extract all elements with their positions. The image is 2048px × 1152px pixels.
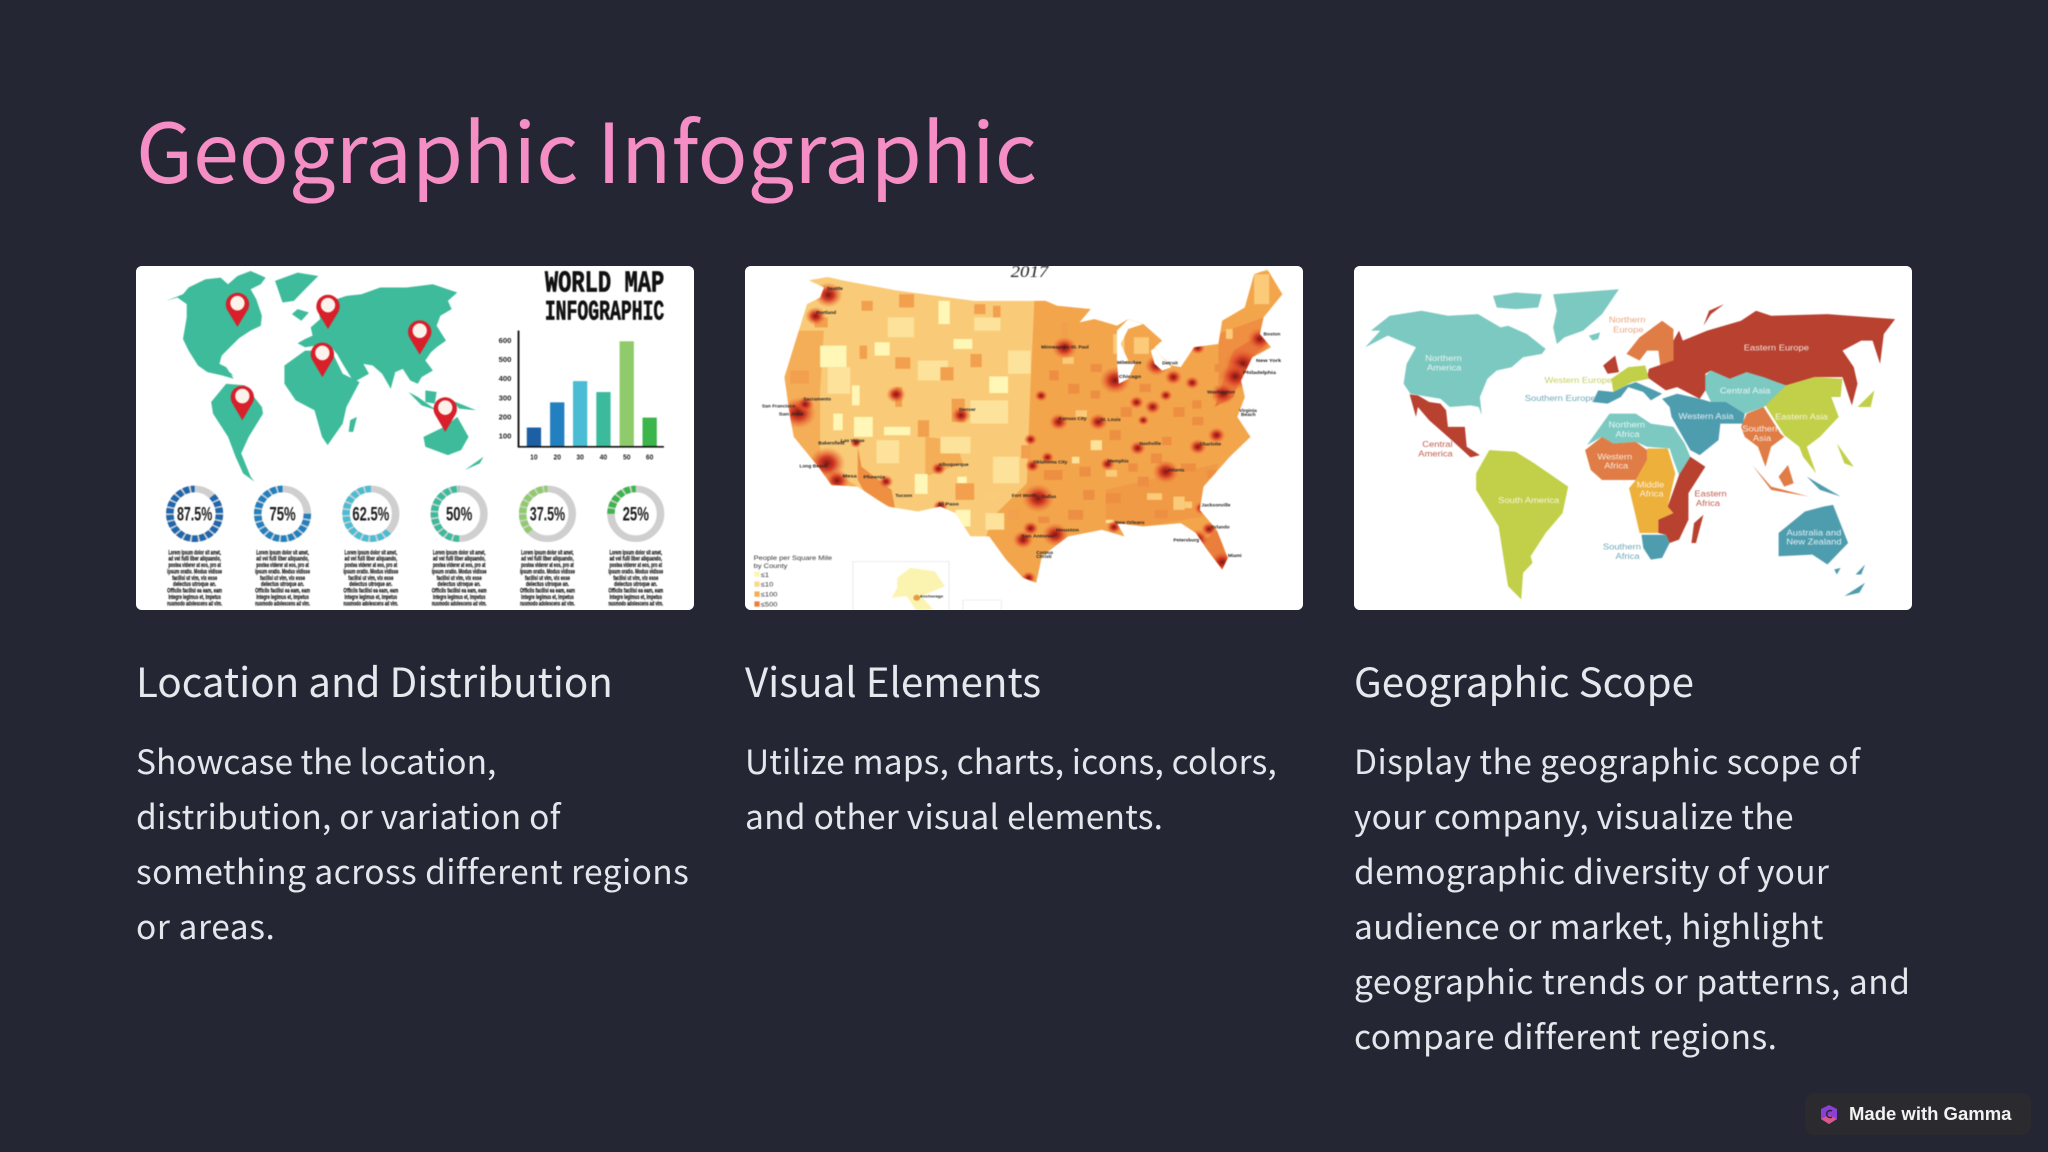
lorem ipsum text columns: integre legimus et, impetus: [433, 594, 486, 601]
text: visual elements: Utilize maps, charts, icons, colors,: [745, 735, 1277, 784]
heading: location and distribution: Location and Distribution: [136, 650, 613, 709]
city labels: Tucson: [895, 493, 912, 498]
lorem ipsum text columns: integre legimus et, impetus: [521, 594, 574, 601]
lorem ipsum text columns: Lorem ipsum dolor sit amet,: [168, 550, 221, 556]
region labels: Eastern: [1694, 489, 1727, 498]
region labels: Africa: [1696, 498, 1720, 508]
title: Geographic Infographic: [136, 87, 1037, 207]
lorem ipsum text columns: [167, 550, 663, 607]
panel: world map infographic image: [136, 266, 694, 610]
donut percentage labels: 50%: [446, 504, 472, 525]
city labels: Memphis: [1108, 459, 1129, 464]
Alaska inset: Anchorage: [920, 594, 944, 599]
region labels: Eastern Asia: [1775, 412, 1828, 421]
city labels: Orlando: [1211, 525, 1230, 529]
bar chart: 500: [499, 356, 511, 364]
city labels: Washington: [1207, 390, 1235, 395]
lorem ipsum text columns: delectus utroque an.: [438, 581, 481, 588]
legend: by County: [754, 563, 788, 570]
city labels: Seattle: [827, 286, 843, 291]
text: visual elements: [745, 735, 1277, 839]
region labels: Southern: [1742, 424, 1780, 433]
lorem ipsum text columns: integre legimus et, impetus: [345, 594, 397, 601]
donut percentage labels: [177, 504, 649, 525]
city labels: Mesa: [843, 474, 857, 480]
bar chart: 20: [553, 453, 561, 461]
donut percentage labels: 37.5%: [530, 504, 565, 525]
lorem ipsum text columns: delectus utroque an.: [526, 581, 569, 588]
region labels: South America: [1498, 496, 1559, 505]
city labels: Portland: [816, 310, 836, 315]
city labels: Virginia: [1239, 408, 1257, 413]
city labels: [762, 286, 1281, 559]
bar chart: [499, 331, 664, 461]
lorem ipsum text columns: Officiis facilisi ea eam, eam: [343, 588, 399, 595]
lorem ipsum text columns: ad vel fulli liber aliquando,: [168, 556, 221, 562]
city labels: St. Louis: [1100, 417, 1121, 422]
region labels: Australia and: [1787, 528, 1841, 537]
icon: map pins: [226, 293, 457, 432]
text: location and distribution: or areas.: [136, 900, 275, 949]
city labels: Houston: [1056, 528, 1079, 534]
bar chart: 200: [499, 413, 511, 421]
text: location and distribution: Showcase the location,: [136, 735, 496, 784]
world map: [166, 271, 484, 482]
lorem ipsum text columns: postea viderer at eos, pro at: [345, 563, 398, 569]
lorem ipsum text columns: delectus utroque an.: [173, 581, 216, 588]
lorem ipsum text columns: Officiis facilisi ea eam, eam: [608, 588, 663, 595]
region labels: Northern: [1609, 315, 1646, 325]
bar chart: 10: [530, 453, 538, 461]
region labels: Middle: [1637, 480, 1664, 489]
city labels: Jacksonville: [1202, 503, 1231, 507]
lorem ipsum text columns: Lorem ipsum dolor sit amet,: [521, 550, 574, 556]
city labels: Petersburg: [1173, 538, 1199, 542]
region labels: America: [1418, 449, 1453, 458]
region labels: [1418, 315, 1842, 561]
city labels: Milwaukee: [1117, 360, 1142, 365]
county patches: [820, 301, 1008, 526]
lorem ipsum text columns: integre legimus et, impetus: [256, 594, 309, 601]
city labels: Detroit: [1162, 361, 1178, 365]
region labels: New Zealand: [1786, 537, 1842, 547]
city labels: Boston: [1264, 332, 1281, 336]
text: location and distribution: distribution, or variation of: [136, 790, 561, 839]
donut charts: [170, 489, 661, 539]
bar chart: 50: [623, 453, 630, 461]
panel: US population density map image: [745, 266, 1303, 610]
lorem ipsum text columns: facilisi ut vim, vix esse: [525, 575, 570, 582]
region labels: Africa: [1616, 552, 1640, 561]
region labels: Western: [1597, 452, 1632, 461]
bar chart: 30: [576, 453, 584, 461]
city labels: Atlanta: [1168, 468, 1185, 473]
bar chart: 100: [499, 432, 511, 440]
city labels: Miami: [1228, 554, 1242, 558]
city labels: Las Vegas: [841, 438, 865, 443]
badge: made with gamma: [1805, 1093, 2031, 1135]
text: geographic scope: demographic diversity of your: [1354, 845, 1829, 894]
city labels: New York: [1256, 358, 1281, 364]
city labels: New Orleans: [1115, 520, 1145, 525]
city labels: Nashville: [1140, 441, 1161, 446]
region labels: Southern Europe: [1525, 394, 1596, 403]
lorem ipsum text columns: nusmodo adolescens ad vim.: [432, 601, 487, 607]
lorem ipsum text columns: facilisi ut vim, vix esse: [172, 575, 217, 582]
bar chart: 60: [646, 453, 653, 461]
legend: [754, 555, 832, 608]
lorem ipsum text columns: ipsum oratio. Modus vidisse: [167, 569, 222, 575]
lorem ipsum text columns: integre legimus et, impetus: [168, 594, 221, 601]
text: location and distribution: [136, 735, 689, 949]
region labels: Asia: [1753, 434, 1771, 443]
region labels: Northern: [1425, 353, 1462, 363]
text: geographic scope: [1354, 735, 1911, 1059]
lorem ipsum text columns: ad vel fulli liber aliquando,: [256, 556, 309, 562]
region labels: Eastern Europe: [1744, 343, 1809, 352]
legend: ≤500: [761, 601, 777, 608]
region labels: Northern: [1609, 420, 1645, 429]
urban hotspots: [780, 282, 1273, 584]
city labels: Albuquerque: [939, 462, 969, 467]
panel: world regions map image: [1354, 266, 1912, 610]
US choropleth map: [768, 268, 1294, 599]
legend: ≤10: [761, 581, 773, 588]
region labels: America: [1427, 363, 1461, 372]
region labels: Africa: [1616, 429, 1640, 439]
lorem ipsum text columns: postea viderer at eos, pro at: [168, 563, 221, 569]
city labels: Oklahoma City: [1033, 460, 1068, 464]
bar chart: 300: [499, 394, 511, 402]
lorem ipsum text columns: ipsum oratio. Modus vidisse: [255, 569, 310, 575]
heading: visual elements: Visual Elements: [745, 650, 1041, 709]
legend: ≤1: [761, 571, 769, 579]
lorem ipsum text columns: delectus utroque an.: [614, 581, 658, 588]
lorem ipsum text columns: nusmodo adolescens ad vim.: [520, 601, 575, 607]
donut percentage labels: 87.5%: [177, 504, 212, 525]
city labels: Chicago: [1119, 374, 1142, 380]
lorem ipsum text columns: Officiis facilisi ea eam, eam: [432, 588, 487, 595]
donut percentage labels: 62.5%: [352, 504, 389, 525]
legend: People per Square Mile: [754, 555, 832, 562]
city labels: Kansas City: [1059, 417, 1087, 421]
donut percentage labels: 25%: [623, 504, 649, 525]
city labels: Phoenix: [863, 475, 885, 480]
lorem ipsum text columns: Officiis facilisi ea eam, eam: [520, 588, 575, 595]
region labels: Central Asia: [1720, 386, 1771, 395]
region labels: Africa: [1640, 489, 1664, 498]
lorem ipsum text columns: ad vel fulli liber aliquando,: [521, 556, 574, 562]
lorem ipsum text columns: facilisi ut vim, vix esse: [437, 575, 482, 582]
city labels: Corpus: [1036, 550, 1054, 555]
Alaska inset: [853, 562, 1001, 610]
lorem ipsum text columns: ad vel fulli liber aliquando,: [609, 556, 662, 562]
text: location and distribution: something across different regions: [136, 845, 689, 894]
city labels: Sacramento: [803, 397, 831, 401]
lorem ipsum text columns: ad vel fulli liber aliquando,: [433, 556, 486, 562]
city labels: Christi: [1036, 555, 1052, 559]
lorem ipsum text columns: nusmodo adolescens ad vim.: [343, 601, 398, 607]
lorem ipsum text columns: nusmodo adolescens ad vim.: [167, 601, 222, 607]
text: visual elements: and other visual elements.: [745, 790, 1163, 839]
lorem ipsum text columns: Officiis facilisi ea eam, eam: [167, 588, 222, 595]
city labels: Long Beach: [799, 464, 828, 468]
region labels: Southern: [1603, 542, 1641, 551]
lorem ipsum text columns: Lorem ipsum dolor sit amet,: [256, 550, 309, 556]
lorem ipsum text columns: facilisi ut vim, vix esse: [260, 575, 305, 582]
city labels: Philadelphia: [1243, 370, 1276, 376]
lorem ipsum text columns: ad vel fulli liber aliquando,: [345, 556, 397, 562]
great lakes: [1117, 319, 1143, 364]
donut percentage labels: 75%: [269, 504, 296, 525]
lorem ipsum text columns: ipsum oratio. Modus vidisse: [343, 569, 399, 575]
city labels: El Paso: [939, 502, 960, 507]
region labels: Central: [1422, 440, 1453, 449]
city labels: San Francisco: [762, 404, 795, 409]
text: geographic scope: compare different regions.: [1354, 1010, 1777, 1059]
region labels: Western Asia: [1678, 411, 1734, 421]
text: geographic scope: Display the geographic scope of: [1354, 735, 1860, 784]
bar chart: 400: [499, 375, 511, 383]
text: geographic scope: your company, visualize the: [1354, 790, 1794, 839]
lorem ipsum text columns: Lorem ipsum dolor sit amet,: [345, 550, 397, 556]
city labels: Denver: [959, 407, 976, 412]
lorem ipsum text columns: postea viderer at eos, pro at: [433, 563, 486, 569]
city labels: San Antonio: [1021, 534, 1055, 540]
city labels: San Jose: [779, 412, 804, 417]
lorem ipsum text columns: postea viderer at eos, pro at: [256, 563, 309, 569]
bar chart: 40: [600, 453, 607, 461]
lorem ipsum text columns: delectus utroque an.: [261, 581, 304, 588]
badge: made with gamma: Made with Gamma: [1849, 1103, 2011, 1124]
heading: geographic scope: Geographic Scope: [1354, 650, 1694, 709]
lorem ipsum text columns: Officiis facilisi ea eam, eam: [255, 588, 310, 595]
city labels: Beach: [1241, 412, 1256, 417]
text: geographic scope: audience or market, highlight: [1354, 900, 1824, 949]
lorem ipsum text columns: Lorem ipsum dolor sit amet,: [433, 550, 486, 556]
city labels: Dallas: [1042, 494, 1057, 499]
region labels: Western Europe: [1544, 376, 1612, 385]
lorem ipsum text columns: facilisi ut vim, vix esse: [613, 575, 659, 582]
city labels: Minneapolis-St. Paul: [1041, 345, 1089, 349]
region labels: Europe: [1613, 325, 1644, 334]
city labels: Fort Worth: [1012, 493, 1037, 498]
eastern denser counties: [970, 268, 1294, 583]
bar chart: 600: [499, 336, 511, 345]
heading: world map infographic: [545, 266, 664, 328]
text: geographic scope: geographic trends or patterns, and: [1354, 955, 1911, 1004]
lorem ipsum text columns: ipsum oratio. Modus vidisse: [432, 569, 487, 575]
icon: gamma logo: [1821, 1105, 1837, 1124]
lorem ipsum text columns: ipsum oratio. Modus vidisse: [520, 569, 575, 575]
lorem ipsum text columns: nusmodo adolescens ad vim.: [255, 601, 310, 607]
region shapes: [1365, 289, 1895, 599]
legend: ≤100: [761, 591, 777, 598]
lorem ipsum text columns: facilisi ut vim, vix esse: [348, 575, 394, 582]
lorem ipsum text columns: postea viderer at eos, pro at: [521, 563, 574, 569]
city labels: Charlotte: [1200, 442, 1222, 446]
city labels: Bakersfield: [818, 441, 845, 445]
region labels: Africa: [1604, 461, 1628, 471]
lorem ipsum text columns: delectus utroque an.: [349, 581, 393, 588]
